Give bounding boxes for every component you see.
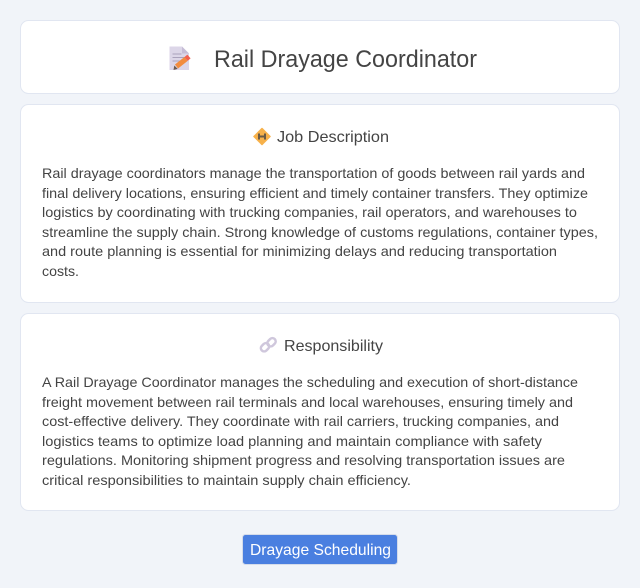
text block: responsibility: logistics teams to optimize load planning and maintain compliance with safety <box>42 433 542 449</box>
tag button: drayage scheduling <box>242 534 398 564</box>
heading: job description: Job Description <box>277 129 389 146</box>
text block: responsibility: A Rail Drayage Coordinator manages the scheduling and execution of short-distance <box>42 374 578 390</box>
text block: job description: Rail drayage coordinators manage the transportation of goods between rail yards and <box>42 165 585 181</box>
text block: job description: streamline the supply chain. Strong knowledge of customs regulations, container types, <box>42 224 598 240</box>
icon: construction diamond <box>254 128 270 144</box>
title: Rail Drayage Coordinator <box>214 46 477 73</box>
panel: responsibility <box>20 314 620 510</box>
panel: job description <box>20 104 620 302</box>
panel: title card <box>20 20 620 94</box>
text block: job description: final delivery locations, ensuring efficient and timely container transfers. They optimize <box>42 185 588 201</box>
text block: responsibility: cost-effective delivery. They coordinate with rail carriers, trucking companies, and <box>42 413 559 429</box>
text block: responsibility: freight movement between rail terminals and local warehouses, ensuring timely and <box>42 394 573 410</box>
text block: job description: and route planning is essential for minimizing delays and reducing transportation <box>42 243 557 259</box>
icon: chain link <box>260 337 277 353</box>
icon: document with pencil <box>170 46 189 70</box>
text block: responsibility: critical responsibilities to maintain supply chain efficiency. <box>42 472 411 488</box>
text block: responsibility <box>42 374 578 488</box>
text block: responsibility: regulations. Monitoring shipment progress and resolving transportation issues are <box>42 452 565 468</box>
text block: job description: logistics by coordinating with trucking companies, rail operators, and warehouses to <box>42 204 577 220</box>
heading: responsibility: Responsibility <box>284 338 383 355</box>
text block: job description: costs. <box>42 263 79 279</box>
text block: job description <box>42 165 598 279</box>
tag button: drayage scheduling: Drayage Scheduling <box>250 542 391 559</box>
